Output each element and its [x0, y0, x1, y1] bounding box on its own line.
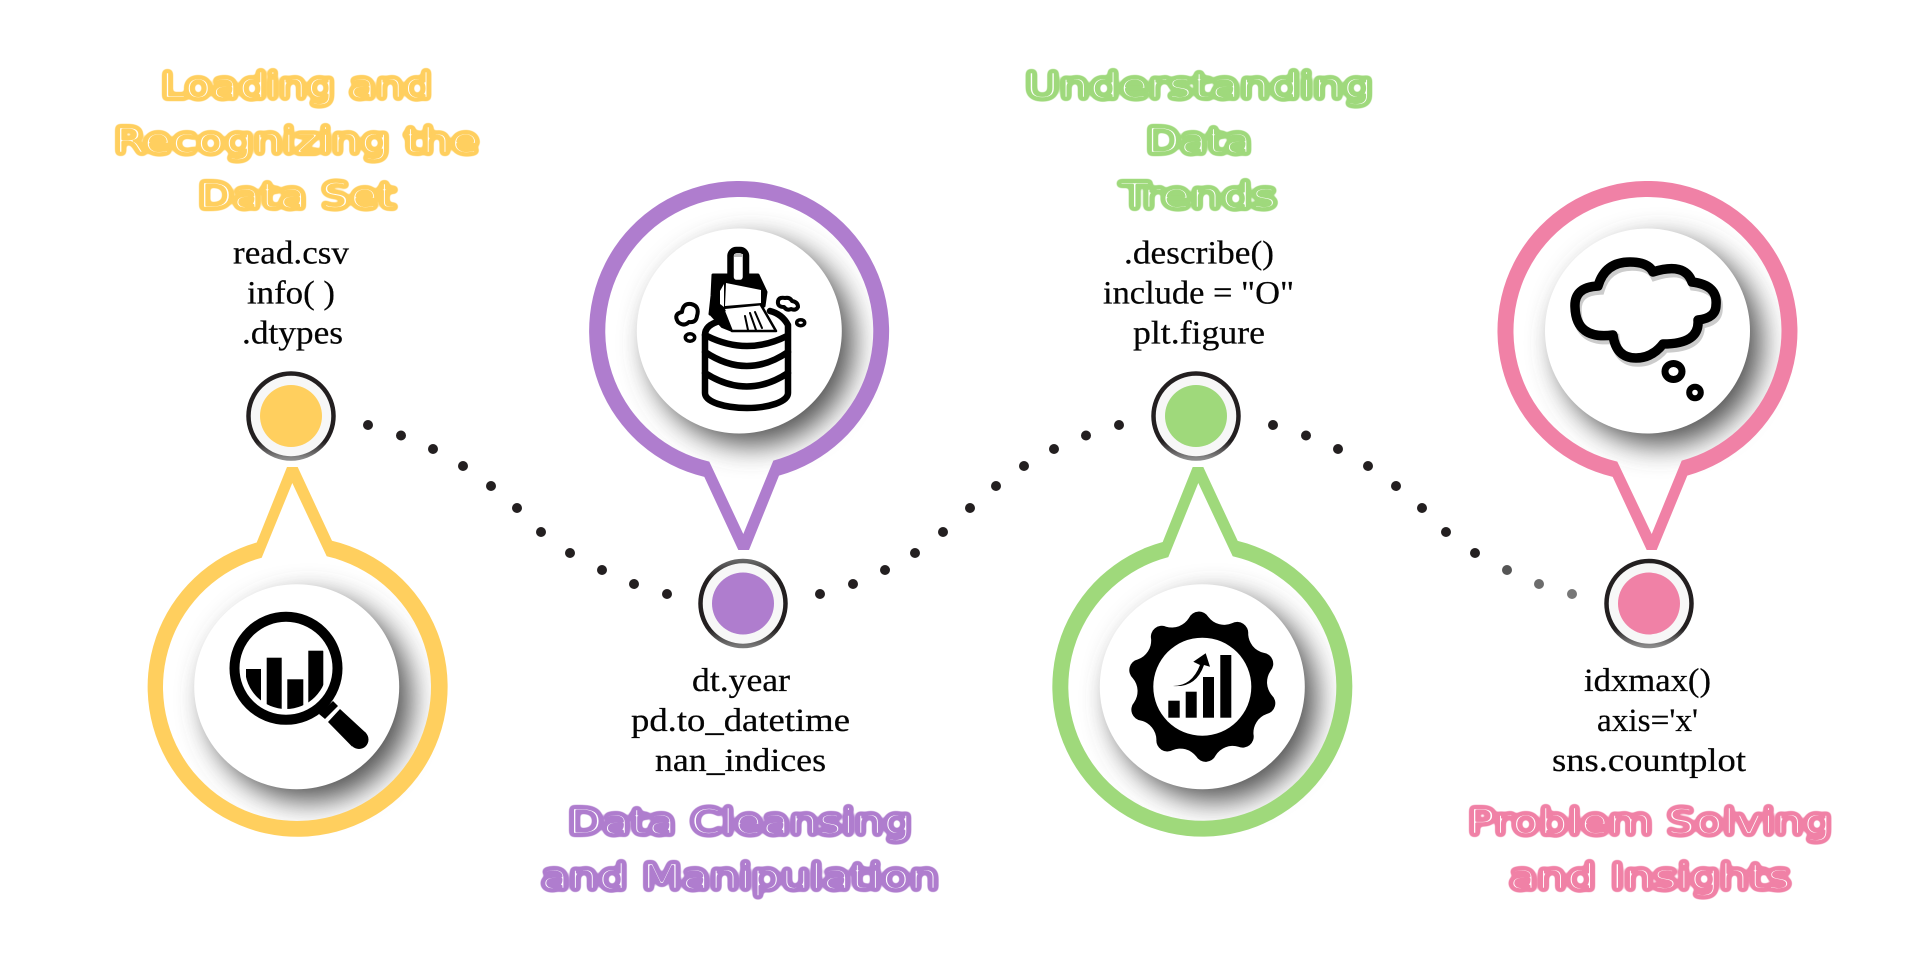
dotted connector path — [363, 420, 1577, 599]
icon: thought cloud — [1575, 262, 1718, 398]
title: trends: Understanding — [1025, 66, 1373, 107]
title: trends: Trends — [1119, 176, 1277, 217]
title: loading: Loading and — [161, 66, 432, 107]
code list: cleansing: dt.year — [692, 663, 790, 699]
title: insights — [1468, 802, 1832, 898]
code list: loading: info( ) — [247, 276, 335, 312]
panel: problem solving and insights — [1468, 181, 1832, 898]
node: yellow — [248, 374, 334, 458]
icon: gear with growth chart — [1129, 612, 1275, 762]
title: cleansing: and Manipulation — [541, 857, 939, 898]
callout pin: yellow — [148, 467, 448, 837]
title: trends — [1025, 66, 1373, 217]
title: trends: Data — [1146, 121, 1252, 162]
icon: magnifier with bars — [234, 617, 368, 749]
code list: insights: axis='x' — [1597, 703, 1698, 739]
code list: loading — [233, 236, 350, 352]
code list: insights — [1552, 663, 1746, 779]
panel: understanding data trends — [1025, 66, 1373, 837]
title: loading: Recognizing the — [114, 121, 479, 162]
code list: insights: idxmax() — [1584, 663, 1711, 699]
code list: loading: read.csv — [233, 236, 350, 272]
node: pink — [1606, 561, 1692, 646]
code list: cleansing — [631, 663, 850, 779]
callout pin: green — [1052, 467, 1352, 837]
panel: loading and recognizing the data set — [114, 66, 479, 837]
code list: trends — [1103, 236, 1294, 352]
callout pin: purple — [589, 181, 889, 550]
node: purple — [700, 561, 786, 646]
code list: cleansing: pd.to_datetime — [631, 703, 850, 739]
code list: insights: sns.countplot — [1552, 743, 1746, 779]
title: loading — [114, 66, 479, 217]
code list: trends: include = "O" — [1103, 276, 1294, 312]
panel: data cleansing and manipulation — [541, 181, 939, 898]
title: cleansing — [541, 802, 939, 898]
title: cleansing: Data Cleansing — [568, 802, 912, 843]
title: loading: Data Set — [198, 176, 396, 217]
callout pin: pink — [1497, 181, 1797, 550]
code list: loading: .dtypes — [242, 316, 343, 352]
code list: trends: plt.figure — [1133, 316, 1265, 352]
icon: database with brush — [676, 250, 805, 408]
title: insights: Problem Solving — [1468, 802, 1832, 843]
code list: cleansing: nan_indices — [655, 743, 826, 779]
code list: trends: .describe() — [1124, 236, 1274, 272]
node: green — [1154, 374, 1238, 458]
title: insights: and Insights — [1509, 857, 1791, 898]
